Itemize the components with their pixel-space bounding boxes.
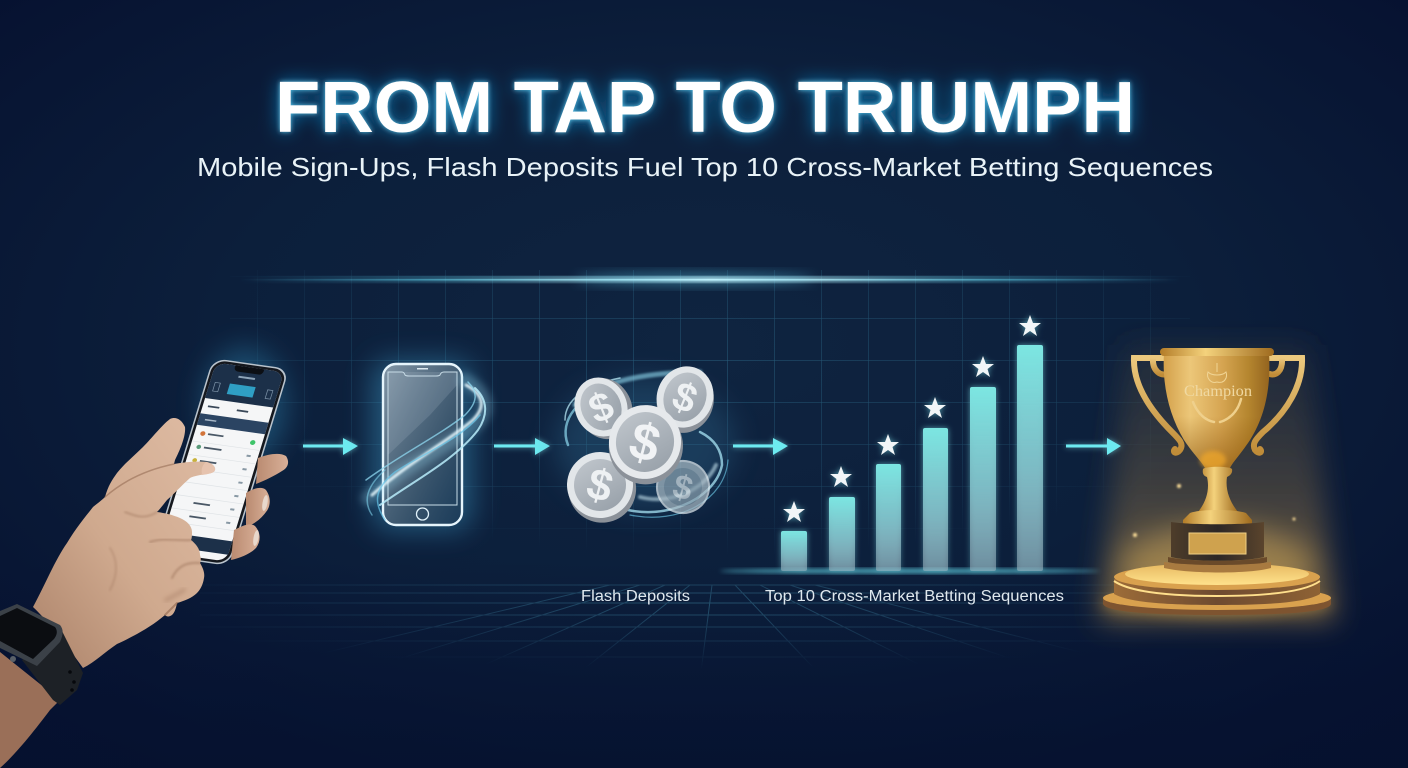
title: FROM TAP TO TRIUMPH (275, 68, 1135, 148)
trophy on podium (1100, 345, 1335, 620)
icon: smartphone (153, 358, 289, 566)
step 2: glass phone (366, 360, 485, 530)
bar chart: rising sequences (720, 315, 1100, 574)
icon: coin translucent: $ (669, 467, 697, 509)
light swirl (366, 380, 485, 520)
icon: trophy (1134, 348, 1302, 572)
icon: coin translucent (651, 455, 715, 519)
chart baseline (720, 568, 1100, 574)
wristwatch (0, 604, 83, 705)
label: top 10 sequences: Top 10 Cross-Market Betting Sequences (765, 588, 1064, 605)
icon: coin top right (646, 358, 724, 442)
coin swirl (555, 372, 735, 517)
handles (1134, 358, 1302, 453)
laurel (1193, 399, 1241, 422)
icon: coin centre (599, 397, 692, 493)
icon: coin bottom left: $ (582, 459, 618, 512)
plinth (1171, 522, 1264, 561)
stars (783, 315, 1041, 522)
bars (781, 345, 1043, 571)
subtitle: Mobile Sign-Ups, Flash Deposits Fuel Top 10 Cross-Market Betting Sequences (197, 152, 1213, 182)
arrow 1 (303, 438, 358, 455)
sparkles (1133, 484, 1296, 537)
icon: coin top left: $ (583, 383, 620, 432)
icon: coin top right: $ (666, 373, 703, 422)
fingers behind phone (231, 454, 288, 560)
icon: coin centre: $ (623, 411, 666, 475)
stem (1198, 467, 1238, 512)
hand shading (105, 464, 200, 615)
step 3: coins (555, 358, 735, 530)
arrow 2 (494, 438, 550, 455)
arrow 3 (733, 438, 788, 455)
background grid (230, 267, 1190, 541)
engraved emblem (1208, 363, 1227, 382)
glow behind phone (203, 347, 287, 463)
phone glow (372, 360, 472, 530)
perspective floor (219, 584, 1120, 659)
hand (33, 418, 215, 668)
icon: coin bottom left (559, 445, 644, 530)
podium (1101, 563, 1333, 616)
icon: translucent phone (383, 364, 462, 525)
engraved text: champion: Champion (1184, 383, 1252, 400)
cup (1164, 353, 1269, 468)
arrow 4 (1066, 438, 1121, 455)
icon: coin top left (566, 368, 642, 448)
arm (0, 652, 60, 768)
step 1: phone in hand (0, 347, 289, 768)
golden haze (1100, 345, 1335, 620)
label: flash deposits: Flash Deposits (581, 588, 690, 605)
